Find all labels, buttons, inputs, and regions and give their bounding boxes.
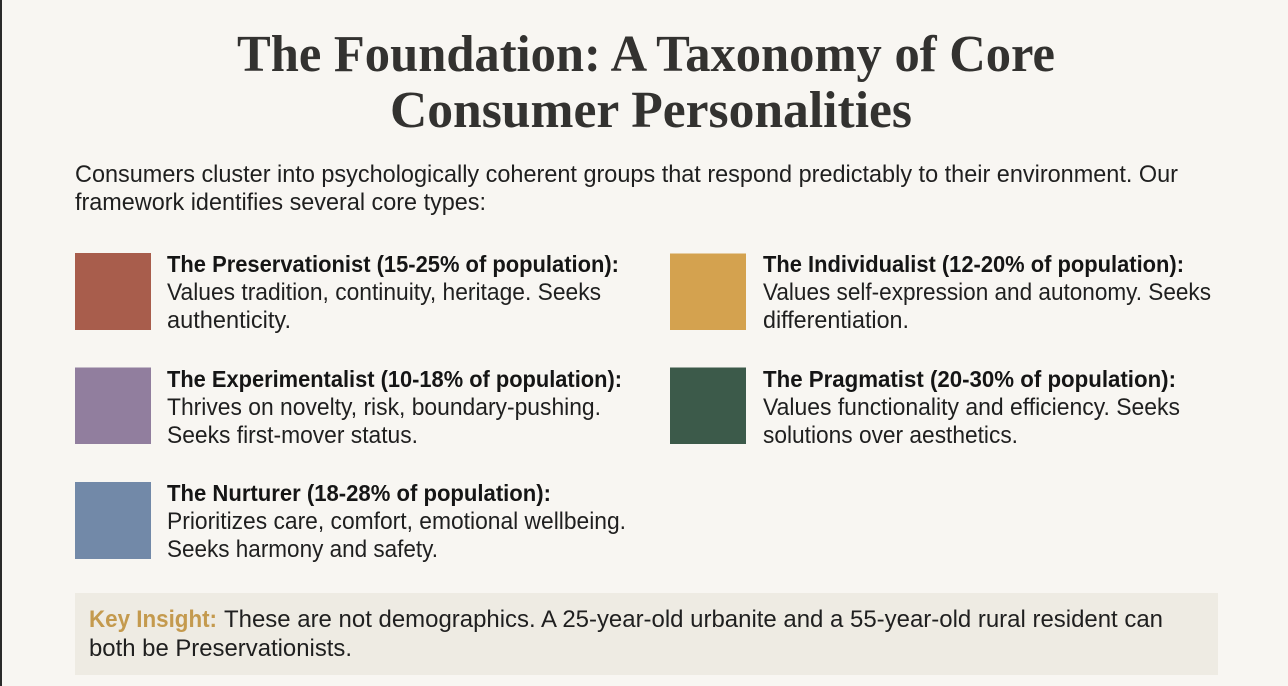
panel: Preservationist: [75, 251, 619, 334]
panel: Nurturer: [75, 480, 626, 563]
panel: Experimentalist: [75, 366, 622, 449]
panel: Individualist: [670, 251, 1211, 334]
text: Experimentalist description: Seeks first-mover status.: [167, 422, 418, 449]
icon: Experimentalist swatch: [75, 368, 151, 444]
text: Preservationist description: The Preservationist (15-25% of population):: [167, 251, 619, 277]
text: Nurturer description: Seeks harmony and safety.: [167, 536, 438, 563]
icon: Individualist swatch: [670, 254, 746, 330]
text: Pragmatist description: Values functionality and efficiency. Seeks: [763, 394, 1180, 421]
intro text: [75, 161, 1178, 216]
text: Nurturer description: Prioritizes care, comfort, emotional wellbeing.: [167, 508, 626, 535]
text: Pragmatist description: solutions over aesthetics.: [763, 422, 1018, 449]
key insight text: These are not demographics. A 25-year-old urbanite and a 55-year-old rural resident can: [224, 606, 1163, 633]
intro text: Consumers cluster into psychologically coherent groups that respond predictably to their environment. Our: [75, 161, 1178, 188]
text: Nurturer description: The Nurturer (18-28% of population):: [167, 480, 551, 506]
key insight text: [89, 606, 1163, 662]
icon: Nurturer swatch: [75, 482, 151, 559]
icon: Pragmatist swatch: [670, 368, 746, 444]
text: Individualist description: [763, 251, 1211, 334]
title: Consumer Personalities: [390, 82, 912, 139]
text: Preservationist description: [167, 251, 619, 334]
icon: Preservationist swatch: [75, 253, 151, 330]
text: Individualist description: The Individualist (12-20% of population):: [763, 251, 1184, 277]
title: The Foundation: A Taxonomy of Core: [237, 26, 1055, 83]
text: Experimentalist description: [167, 366, 622, 449]
key insight label: Key Insight:: [89, 606, 217, 633]
text: Experimentalist description: The Experimentalist (10-18% of population):: [167, 366, 622, 392]
panel: Pragmatist: [670, 366, 1180, 449]
text: Nurturer description: [167, 480, 626, 563]
text: Preservationist description: authenticity.: [167, 307, 291, 334]
text: Pragmatist description: [763, 366, 1180, 449]
text: Individualist description: Values self-expression and autonomy. Seeks: [763, 279, 1211, 306]
text: Pragmatist description: The Pragmatist (20-30% of population):: [763, 366, 1176, 392]
title: [237, 26, 1055, 139]
intro text: framework identifies several core types:: [75, 189, 486, 216]
text: Individualist description: differentiation.: [763, 307, 909, 334]
text: Experimentalist description: Thrives on novelty, risk, boundary-pushing.: [167, 394, 601, 421]
callout: key insight: [75, 593, 1218, 675]
key insight text: both be Preservationists.: [89, 635, 352, 662]
text: Preservationist description: Values tradition, continuity, heritage. Seeks: [167, 279, 601, 306]
